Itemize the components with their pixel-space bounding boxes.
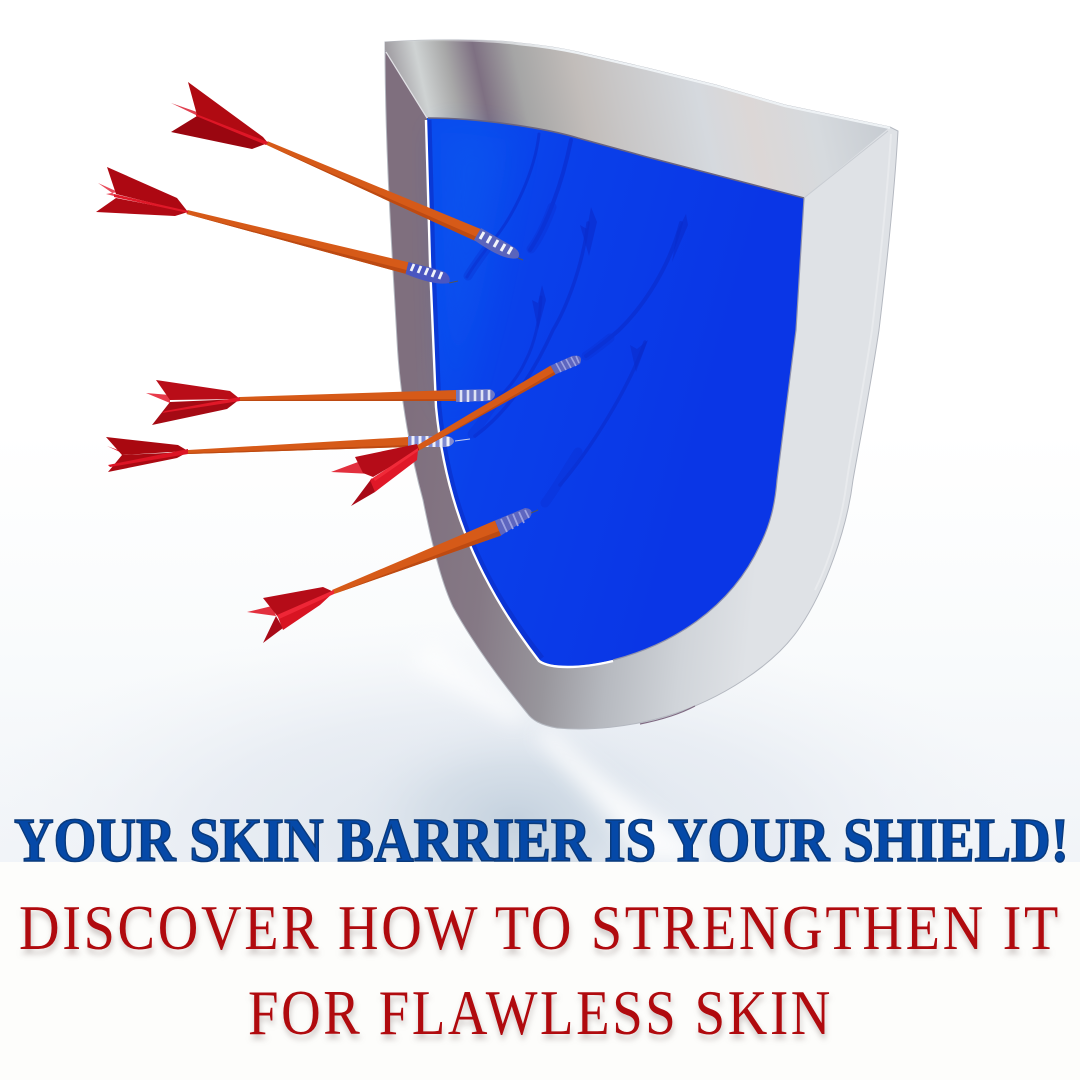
reflection: arrow shadows in panel (467, 134, 681, 503)
shield top bevel (385, 40, 890, 198)
arrow 3 (146, 380, 495, 425)
arrow 6 (247, 508, 538, 643)
panel white rim (426, 120, 613, 667)
blue panel (427, 118, 804, 666)
shield right corner crease (804, 131, 888, 198)
shield outer frame (385, 40, 898, 729)
arrow 5: front arrow (331, 356, 581, 506)
shield left crease (386, 52, 427, 118)
shield bottom rim shade (640, 706, 695, 724)
bottom text panel (0, 862, 1080, 1080)
subtitle line 2: FOR FLAWLESS SKIN (248, 978, 833, 1048)
arrow 4 (106, 436, 470, 472)
panel top shadow rim (428, 118, 804, 198)
shield (385, 40, 898, 729)
arrow 2 (96, 167, 458, 284)
panel right rim (613, 198, 804, 660)
shield top highlight edge (400, 40, 890, 128)
arrow 1 (171, 82, 523, 260)
reflection: fletching shadows (532, 207, 688, 372)
shield right rim highlight (815, 134, 891, 590)
blue panel left glow (440, 130, 510, 420)
panel left dark edge (429, 120, 542, 658)
